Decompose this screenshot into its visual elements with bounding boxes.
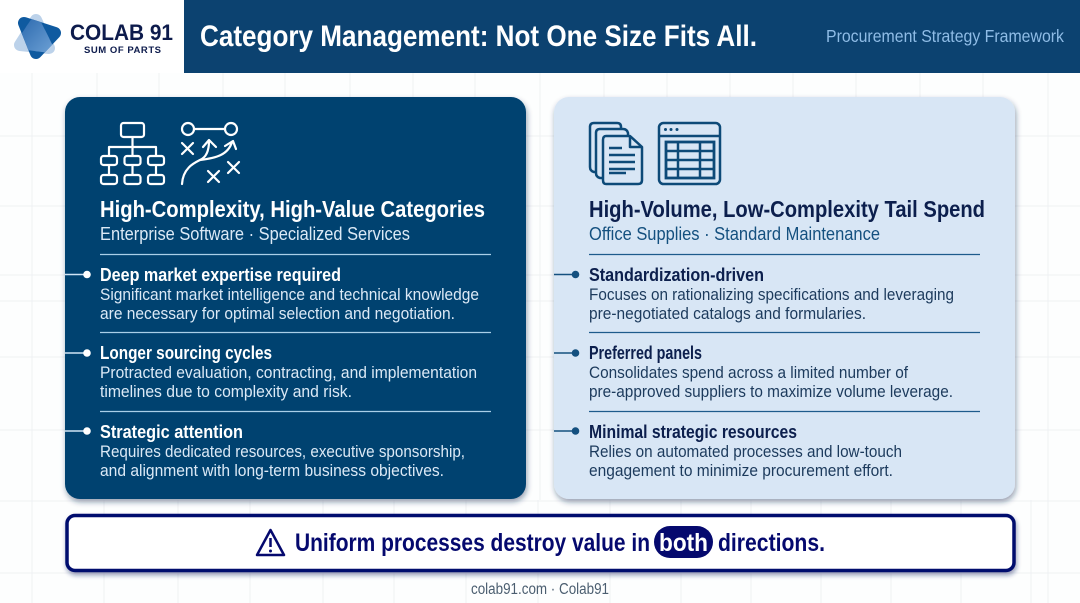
item: deep market expertise: are necessary for optimal selection and negotiation. bbox=[100, 305, 455, 323]
panel: tail spend bbox=[554, 97, 1015, 499]
panel subheading: Office Supplies · Standard Maintenance bbox=[589, 224, 880, 244]
panel heading: High-Volume, Low-Complexity Tail Spend bbox=[589, 196, 985, 222]
panel: high-complexity categories bbox=[65, 97, 526, 499]
item: minimal strategic resources: Minimal strategic resources bbox=[589, 422, 797, 442]
header bar bbox=[0, 0, 1080, 73]
icon: warning triangle bbox=[257, 530, 284, 555]
item: standardization-driven bbox=[554, 265, 954, 323]
icon: strategy playbook bbox=[182, 123, 239, 184]
item: deep market expertise: Deep market expertise required bbox=[100, 265, 341, 285]
logo wordmark bbox=[70, 20, 173, 56]
item: minimal strategic resources bbox=[554, 422, 902, 480]
item: strategic attention: and alignment with long-term business objectives. bbox=[100, 462, 444, 480]
item: longer sourcing cycles: timelines due to complexity and risk. bbox=[100, 383, 352, 401]
item: longer sourcing cycles bbox=[65, 343, 477, 401]
item: longer sourcing cycles: Protracted evaluation, contracting, and implementation bbox=[100, 364, 477, 382]
panel heading: High-Complexity, High-Value Categories bbox=[100, 196, 485, 222]
icon: org chart bbox=[101, 123, 164, 184]
icon: table window bbox=[659, 123, 720, 184]
logo block bbox=[0, 0, 184, 73]
item: preferred panels: Preferred panels bbox=[589, 343, 702, 363]
item: longer sourcing cycles: Longer sourcing cycles bbox=[100, 343, 272, 363]
item: minimal strategic resources: Relies on automated processes and low-touch bbox=[589, 443, 902, 461]
logo wordmark: COLAB 91 bbox=[70, 20, 173, 45]
item: strategic attention: Strategic attention bbox=[100, 422, 243, 442]
panel subheading: Enterprise Software · Specialized Services bbox=[100, 224, 410, 244]
item: preferred panels bbox=[554, 343, 953, 401]
callout banner bbox=[67, 516, 1014, 570]
item: deep market expertise bbox=[65, 265, 479, 323]
item: preferred panels: pre-approved suppliers to maximize volume leverage. bbox=[589, 383, 953, 401]
title: Category Management: Not One Size Fits All. bbox=[200, 20, 757, 53]
footer: colab91.com · Colab91 bbox=[471, 581, 609, 598]
callout text: Uniform processes destroy value in bbox=[295, 529, 650, 557]
item: standardization-driven: Standardization-driven bbox=[589, 265, 764, 285]
highlighted word: both bbox=[659, 529, 708, 557]
logo wordmark: SUM OF PARTS bbox=[84, 45, 161, 56]
icon: document stack bbox=[590, 123, 642, 184]
callout text end: directions. bbox=[718, 529, 825, 557]
item: deep market expertise: Significant market intelligence and technical knowledge bbox=[100, 286, 479, 304]
item: standardization-driven: pre-negotiated catalogs and formularies. bbox=[589, 305, 866, 323]
item: strategic attention: Requires dedicated resources, executive sponsorship, bbox=[100, 443, 465, 461]
item: minimal strategic resources: engagement to minimize procurement effort. bbox=[589, 462, 893, 480]
item: standardization-driven: Focuses on rationalizing specifications and leveraging bbox=[589, 286, 954, 304]
icon: logo mark bbox=[20, 20, 55, 53]
item: strategic attention bbox=[65, 422, 465, 480]
item: preferred panels: Consolidates spend across a limited number of bbox=[589, 364, 908, 382]
